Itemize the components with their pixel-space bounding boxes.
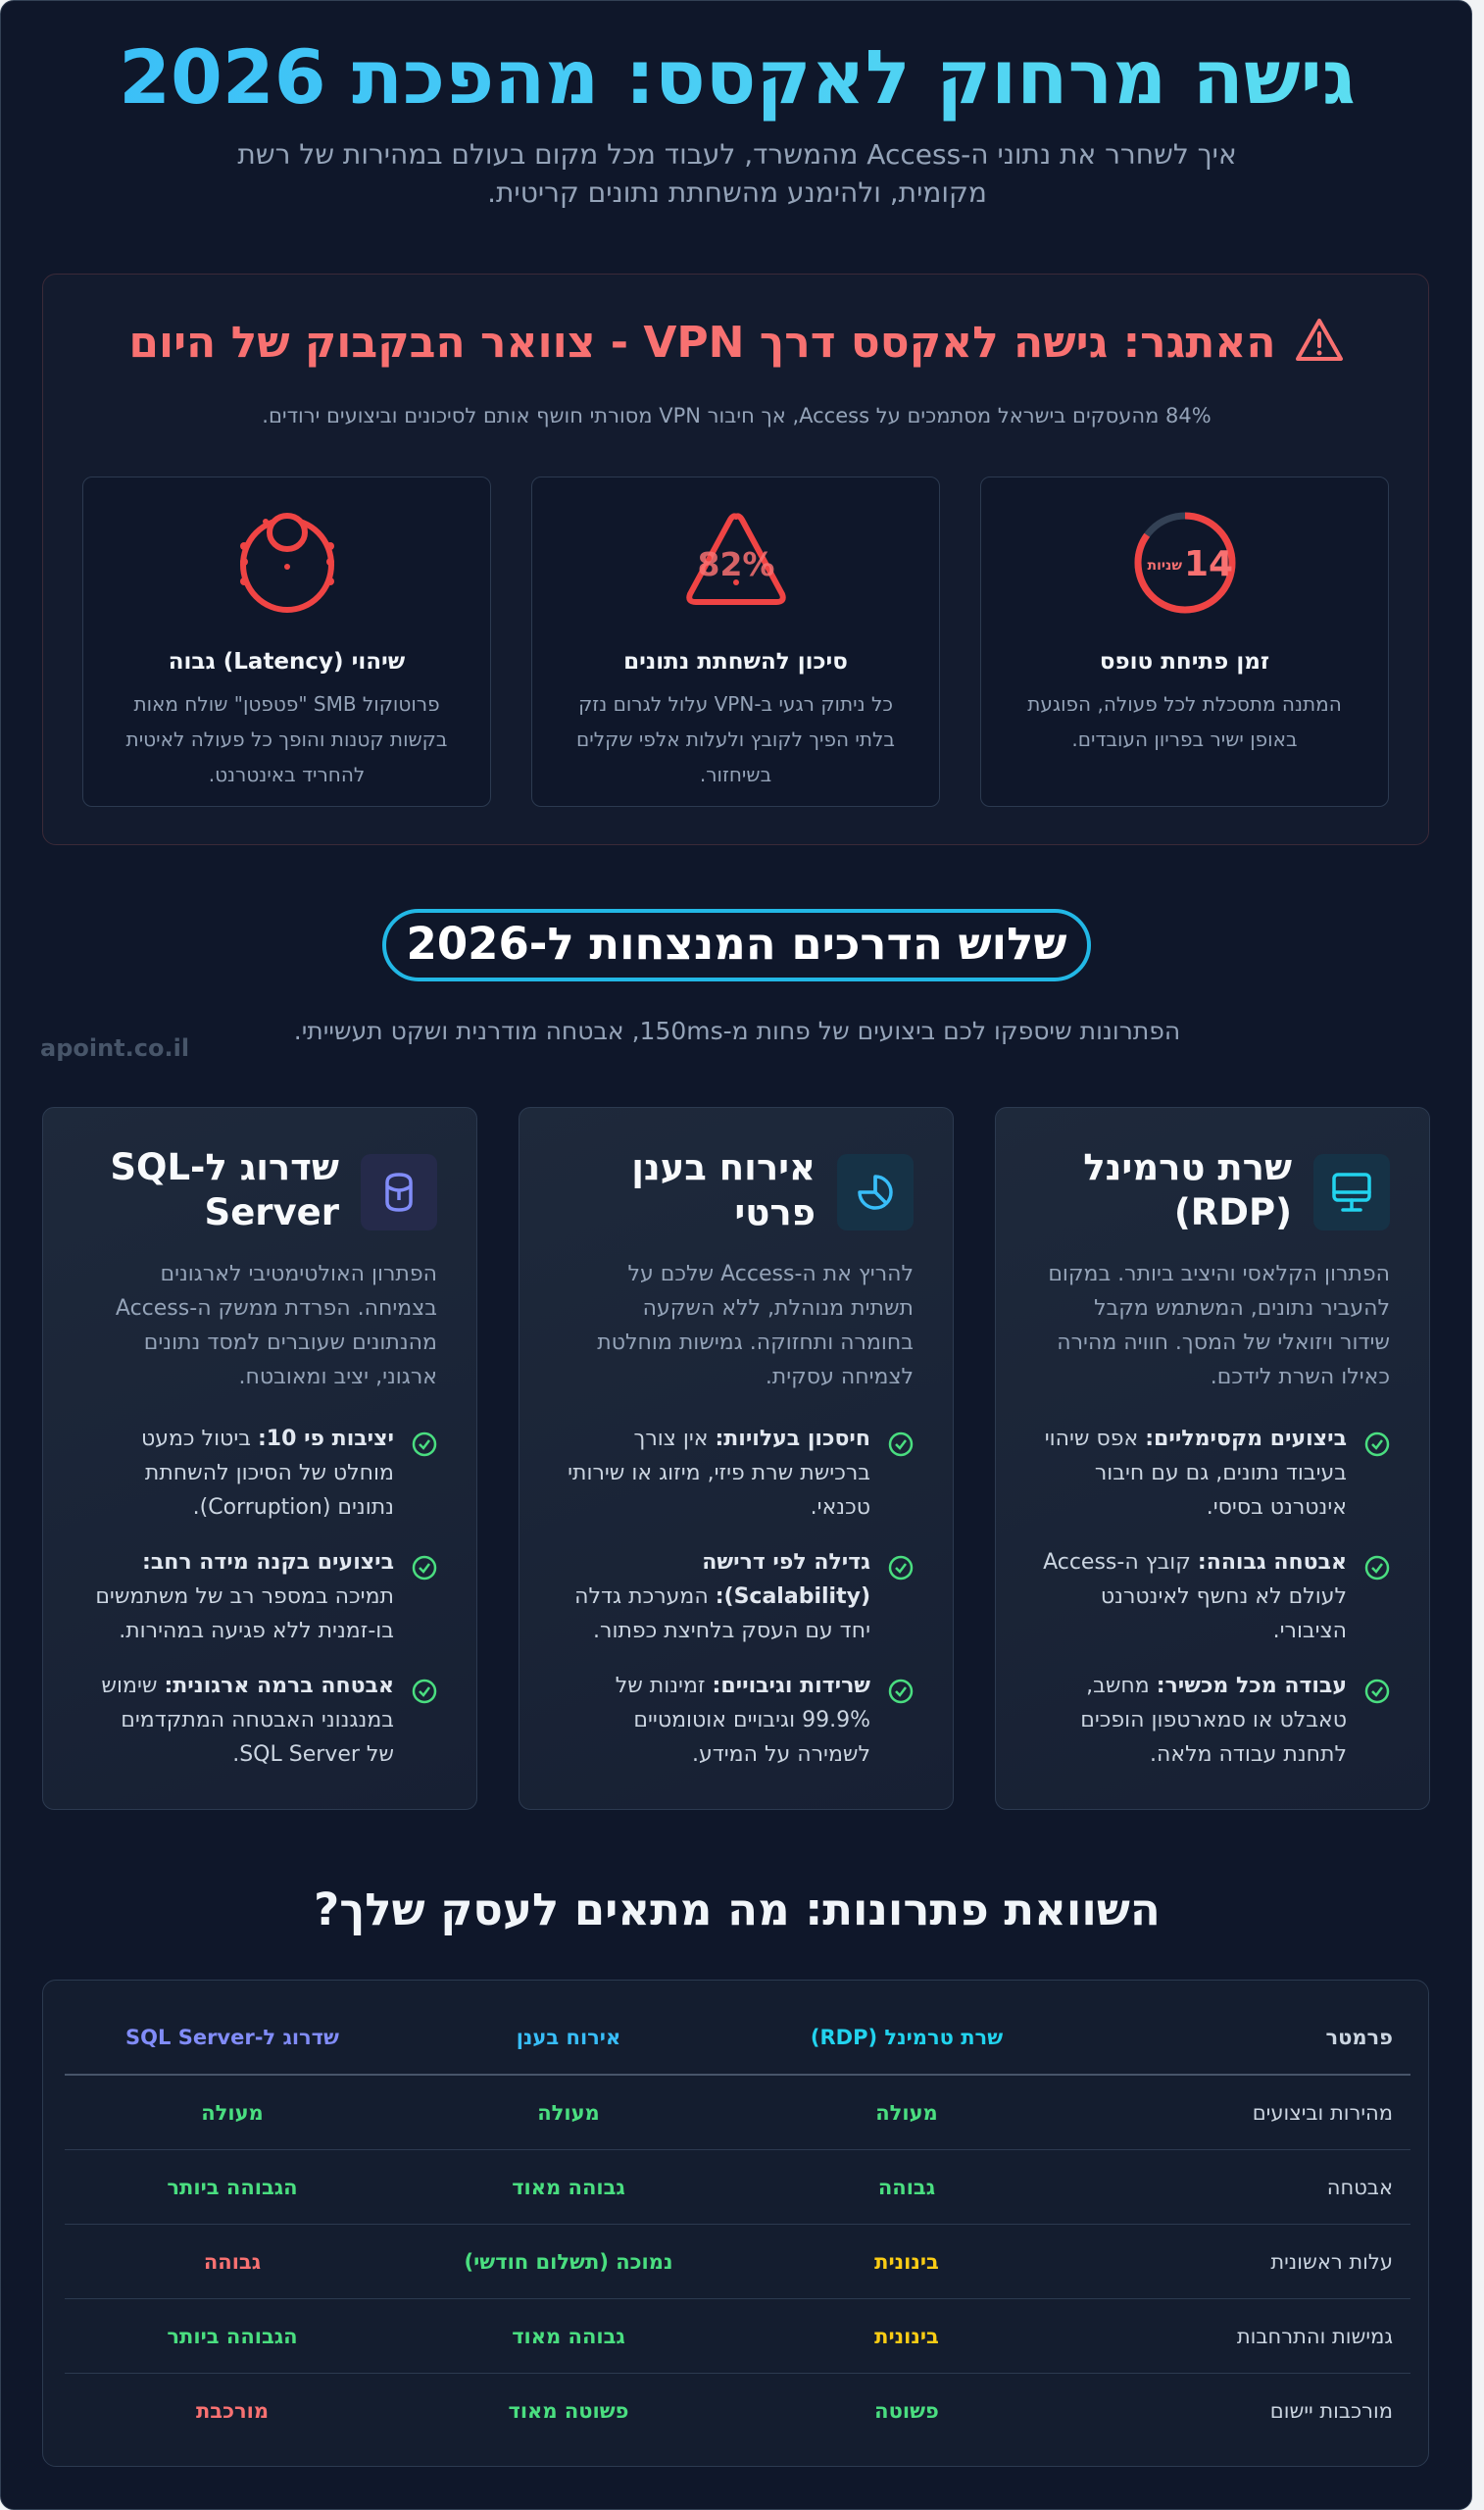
card: private cloud: פרטי [734,1191,816,1233]
title: גישה מרחוק לאקסס: מהפכת 2026 [119,33,1356,121]
comparison table [42,1980,1429,2467]
bullet list: בו-זמנית ללא פגיעה במהירות. [119,1619,394,1643]
row: complexity: פשוטה [874,2399,939,2423]
bullet list: נתונים (Corruption). [193,1495,394,1520]
icon: monitor [1313,1154,1390,1230]
row: speed: מעולה [201,2101,264,2125]
bullet list: לתחנת עבודה מלאה. [1150,1742,1347,1767]
card: open time [980,477,1389,807]
row: flexibility: בינונית [874,2325,939,2348]
bullet list: ביצועים מקסימליים: אפס שיהוי [1045,1427,1347,1451]
card: SQL Server: מהנתונים שעוברים למסד נתונים [144,1330,437,1355]
bullet list: יחד עם העסק בלחיצת כפתור. [593,1619,870,1643]
table header: שרת טרמינל (RDP) [811,2026,1003,2049]
row: complexity [196,2399,1393,2423]
row: flexibility: גמישות והתרחבות [1237,2325,1393,2348]
card: SQL Server: בצמיחה. הפרדת ממשק ה-Access [116,1296,437,1321]
icon: progress ring 14: 14 [1184,544,1233,584]
bullet list: בעיבוד נתונים, גם עם חיבור [1095,1461,1347,1485]
card: data corruption: כל ניתוק רגעי ב-VPN עלול לגרום נזק בלתי הפיך לקובץ ולעלות אלפי שקלים בשיחזור. [576,692,895,786]
bullet list: אינטרנט בסיסי. [1207,1495,1347,1520]
section subtext: הפתרונות שיספקו לכם ביצועים של פחות מ-150ms, אבטחה מודרנית ושקט תעשייתי. [294,1017,1180,1045]
bullet list [1043,1427,1390,1767]
row: speed: מעולה [537,2101,600,2125]
card: private cloud [519,1107,954,1810]
row: initial cost [65,2225,1410,2299]
row: initial cost: גבוהה [204,2250,261,2274]
panel: challenge [42,274,1429,845]
bullet list: ביצועים בקנה מידה רחב: [142,1550,394,1575]
icon: progress ring 14: שניות [1148,558,1182,574]
card: SQL Server [42,1107,477,1810]
row: security: הגבוהה ביותר [167,2176,298,2199]
card: RDP: (RDP) [1174,1191,1292,1233]
bullet list: לעולם לא נחשף לאינטרנט [1101,1584,1347,1609]
card: SQL Server: ארגוני, יציב ומאובטח. [239,1365,437,1389]
bullet list [95,1427,437,1767]
card: SQL Server: הפתרון האולטימטיבי לארגונים [160,1262,437,1286]
bullet list: 99.9% וגיבויים אוטומטיים [633,1708,870,1732]
watermark: apoint.co.il [40,1034,189,1062]
row: speed: מעולה [875,2101,938,2125]
row: speed [65,2076,1410,2150]
bullet list: לשמירה על המידע. [692,1742,870,1767]
bullet list: ברכישת שרת פיזי, מיזוג או שירותי [568,1461,870,1485]
card: RDP [995,1107,1430,1810]
card: open time: המתנה מתסכלת לכל פעולה, הפוגעת באופן ישיר בפריון העובדים. [1027,692,1342,751]
row: security: גבוהה מאוד [512,2176,625,2199]
bullet list: מוחלט של הסיכון להשחתת [145,1461,394,1485]
icon: database [361,1154,437,1230]
icon: cloud pie [837,1154,914,1230]
row: flexibility: גבוהה מאוד [512,2325,625,2348]
bullet list: תמיכה במספר רב של משתמשים [95,1584,394,1609]
heading pill: three winning ways [382,909,1091,981]
card: private cloud: לצמיחה עסקית. [766,1365,914,1389]
card: data corruption: סיכון להשחתת נתונים [623,649,848,675]
bullet list: עבודה מכל מכשיר: מחשב, [1086,1674,1347,1698]
row: flexibility [65,2299,1410,2374]
row: complexity: מורכבת [196,2399,269,2423]
row: security: אבטחה [1327,2176,1393,2199]
card: latency [82,477,491,807]
row: speed: מהירות וביצועים [1253,2101,1393,2125]
card: data corruption [531,477,940,807]
card: private cloud: בחומרה ותחזוקה. גמישות מוחלטת [597,1330,914,1355]
bullet list: יציבות פי 10: ביטול כמעט [141,1427,394,1451]
bullet list: של SQL Server. [232,1742,394,1767]
subtitle: איך לשחרר את נתוני ה-Access מהמשרד, לעבוד מכל מקום בעולם במהירות של רשת מקומית, ולהימנע מהשחתת נתונים קריטית. [237,138,1237,209]
row: security [65,2150,1410,2225]
table header: אירוח בענן [517,2026,620,2049]
challenge subtext: 84% מהעסקים בישראל מסתמכים על Access, אך חיבור VPN מסורתי חושף אותם לסיכונים וביצועים ירודים. [262,404,1212,427]
table header: פרמטר [1325,2026,1393,2049]
heading: comparison: השוואת פתרונות: מה מתאים לעסק שלך? [314,1883,1161,1935]
bullet list: טכנאי. [811,1495,870,1520]
icon: warning 82% [686,513,786,605]
bullet list: אבטחה ברמה ארגונית: שימוש [101,1674,394,1698]
card: private cloud: להריץ את ה-Access שלכם על [628,1262,914,1286]
bullet list: אבטחה גבוהה: קובץ ה-Access [1043,1550,1347,1575]
row: complexity: פשוטה מאוד [508,2399,629,2423]
table header: שדרוג ל-SQL Server [125,2026,339,2049]
heading: challenge: האתגר: גישה לאקסס דרך VPN - צוואר הבקבוק של היום [128,318,1276,368]
bullet list: שרידות וגיבויים: זמינות של [616,1674,870,1698]
row: initial cost: בינונית [874,2250,939,2274]
card: private cloud: תשתית מנוהלת, ללא השקעה [643,1296,914,1321]
bullet list: (Scalability): המערכת גדלה [574,1584,870,1609]
card: RDP: כאילו השרת לידכם. [1211,1365,1390,1389]
card: open time: זמן פתיחת טופס [1100,649,1269,675]
card: private cloud: אירוח בענן [631,1146,816,1188]
bullet list: הציבורי. [1273,1619,1347,1643]
row: complexity: מורכבות יישום [1270,2399,1393,2423]
bullet list: טאבלט או סמארטפון הופכים [1080,1708,1347,1732]
row: initial cost: נמוכה (תשלום חודשי) [465,2250,672,2274]
bullet list: במנגנוני האבטחה המתקדמים [121,1708,394,1732]
row: security: גבוהה [878,2176,935,2199]
table header [65,2000,1410,2076]
card: SQL Server: Server [205,1191,339,1233]
icon: stopwatch [240,513,334,613]
card: RDP: להעביר נתונים, המשתמש מקבל [1094,1296,1390,1321]
icon: progress ring 14 [1135,512,1235,614]
bullet list: חיסכון בעלויות: אין צורך [634,1427,870,1451]
bullet list: גדילה לפי דרישה [702,1550,870,1575]
icon: warning 82%: 82% [698,545,774,583]
heading pill: three winning ways: שלוש הדרכים המנצחות ל-2026 [407,918,1066,970]
card: SQL Server: שדרוג ל-SQL [110,1146,339,1188]
card: latency: שיהוי (Latency) גבוה [169,649,405,675]
card: RDP: שרת טרמינל [1083,1146,1292,1188]
row: initial cost: עלות ראשונית [1270,2250,1393,2274]
card: RDP: הפתרון הקלאסי והיציב ביותר. במקום [1048,1262,1390,1286]
card: RDP: שידור ויזואלי של המסך. חוויה מהירה [1057,1330,1390,1355]
bullet list [568,1427,914,1767]
row: flexibility: הגבוהה ביותר [167,2325,298,2348]
card: latency: פרוטוקול SMB "פטפטן" שולח מאות בקשות קטנות והופך כל פעולה לאיטית להחריד באינטרנט. [126,692,447,786]
